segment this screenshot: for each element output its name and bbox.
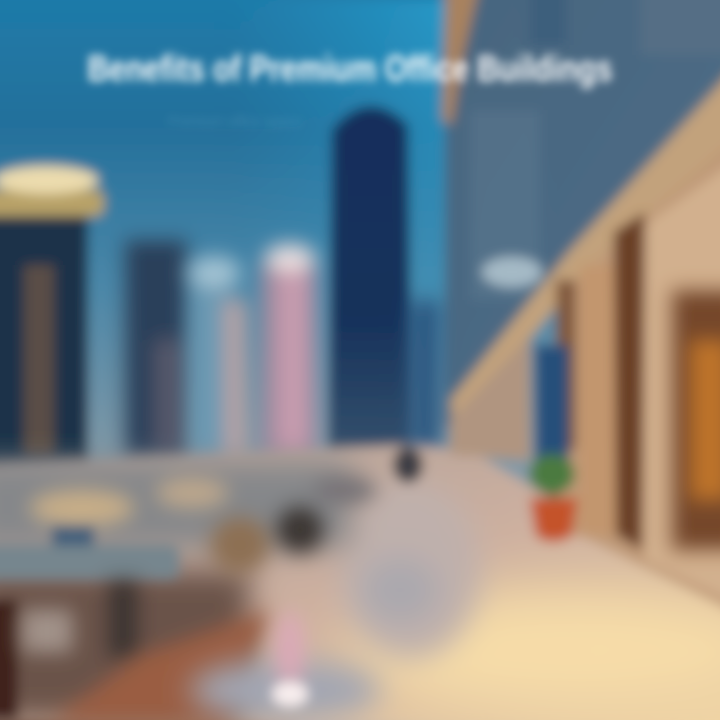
floor xyxy=(0,445,720,720)
potted plant xyxy=(529,454,578,542)
second tower xyxy=(125,240,187,460)
pale tower xyxy=(188,257,246,460)
backdrop for the bottom edge xyxy=(0,680,720,720)
left tower with gold crown xyxy=(0,166,104,475)
tall navy tower xyxy=(328,106,440,450)
right wall with wood beams xyxy=(450,50,720,620)
orange strip on facade edge xyxy=(442,0,482,125)
background: sky xyxy=(0,0,720,490)
terrace furniture xyxy=(0,447,423,720)
sky highlight near the glass facade xyxy=(292,0,451,292)
floor reflection xyxy=(190,558,438,720)
glass facade building xyxy=(445,0,720,430)
reddish foreground floor xyxy=(50,610,270,720)
subtitle: Premium office space xyxy=(168,113,302,129)
pink tower xyxy=(262,245,316,462)
